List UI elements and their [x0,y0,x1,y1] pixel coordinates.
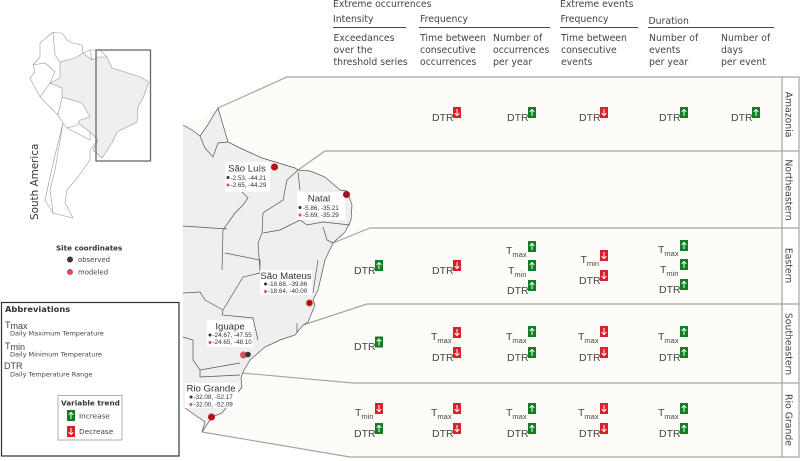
panel: abbreviations: Daily Temperature Range [10,370,92,378]
legend: site coordinates: Site coordinates [56,244,122,252]
label: Iguape [207,320,253,347]
table headers: threshold series [334,57,408,68]
row: Eastern trends: T [580,254,587,266]
panel: abbreviations [2,302,179,456]
row: Eastern trends: DTR [579,275,601,287]
map: eastern Brazil [183,108,352,432]
inset map: South America [30,32,150,218]
table headers: events [649,45,680,56]
label: Natal: -5.69, -35.29 [303,212,339,219]
row: Amazonia trends: DTR [659,112,681,124]
panel: table background [183,77,782,457]
row: Southeastern trends: T [578,331,584,343]
table headers [333,0,774,68]
row: Amazonia trends [432,107,760,124]
table headers: Duration [648,16,689,27]
table headers: Time between [419,33,486,44]
label: Natal [297,192,345,220]
row: Eastern trends: DTR [507,285,529,297]
label: Rio Grande: -32.00, -52.09 [194,402,233,408]
table headers: days [721,45,743,56]
label: Iguape: -24.67, -47.55 [212,332,252,339]
label: São Mateus: -18.68, -39.86 [268,281,308,288]
label: Rio Grande: Rio Grande [186,384,236,394]
label: São Luís: -2.65, -44.29 [230,182,267,189]
row: Amazonia trends: DTR [432,112,454,124]
table headers: Time between [560,33,627,44]
panel: abbreviations: T [5,341,10,351]
label: Rio Grande [185,383,238,408]
row: Amazonia trends: DTR [579,112,601,124]
row: Eastern trends: DTR [432,265,454,277]
row: Rio Grande trends: max [664,412,679,421]
label: Natal: Natal [308,194,330,204]
row: Eastern trends: T [660,264,666,276]
table headers: consecutive [561,45,617,56]
row: Southeastern trends: max [512,336,527,345]
row: Rio Grande trends: max [437,412,452,421]
legend: site coordinates: modeled [78,268,108,276]
row: Rio Grande trends: T [658,407,664,419]
row: Southeastern trends: DTR [507,352,529,364]
row: Eastern trends: T [658,244,664,256]
panel: abbreviations: DTR [4,361,23,371]
row labels: Amazonia [782,92,794,137]
row: Eastern trends: min [514,270,527,279]
row: Eastern trends: DTR [659,284,681,296]
label: São Mateus: São Mateus [260,271,312,282]
label: São Mateus [260,270,312,295]
row: Rio Grande trends: DTR [507,428,529,440]
legend: variable trend: Variable trend [61,398,120,408]
label: São Luís: São Luís [228,164,266,174]
row: Rio Grande trends [354,403,688,440]
table headers: per year [493,57,532,68]
panel: abbreviations: Abbreviations [5,304,70,314]
table headers: over the [334,45,373,56]
row: Southeastern trends: max [584,336,599,345]
row: Rio Grande trends: DTR [659,428,681,440]
site markers [208,164,350,420]
table headers: per event [721,57,766,68]
row labels: Southeastern [782,313,794,375]
row labels: Eastern [782,248,794,283]
row: Rio Grande trends: T [506,407,512,419]
label: Natal: -5.86, -35.21 [303,205,339,212]
row: Southeastern trends: DTR [354,341,376,353]
row: Southeastern trends: DTR [659,352,681,364]
table headers: Frequency [560,14,609,25]
label: São Mateus: -18.64, -40.00 [268,288,308,295]
row: Rio Grande trends: DTR [579,428,601,440]
row: Rio Grande trends: max [512,412,527,421]
row: Eastern trends: DTR [354,265,376,277]
legend: variable trend: Increase [79,412,110,420]
label: Iguape: -24.65, -48.10 [212,339,252,346]
row labels [782,92,794,446]
row: Southeastern trends: max [437,336,452,345]
label: Iguape: Iguape [215,322,245,332]
row: Eastern trends [354,240,688,297]
row: Eastern trends: max [664,249,679,258]
row: Southeastern trends: T [431,331,437,343]
row: Southeastern trends: DTR [579,352,601,364]
table headers: occurrences [493,45,550,56]
row: Amazonia trends: DTR [731,112,753,124]
table headers: consecutive [420,45,476,56]
row: Amazonia trends: DTR [507,112,529,124]
row labels: Rio Grande [782,394,794,446]
row: Rio Grande trends: max [584,412,599,421]
table headers: Frequency [420,14,469,25]
table headers: Number of [721,33,771,44]
legend: site coordinates: observed [78,256,110,264]
legend: variable trend: Decrease [79,427,114,436]
table headers: Number of [649,33,699,44]
row: Rio Grande trends: DTR [354,428,376,440]
row: Rio Grande trends: T [431,407,437,419]
table headers: Intensity [333,14,374,25]
panel: abbreviations: T [5,320,10,330]
row labels: Northeastern [782,159,794,221]
panel: abbreviations: Daily Minimum Temperature [10,350,102,358]
table headers: Exceedances [334,33,395,44]
legend: variable trend [58,396,122,440]
panel: abbreviations: Daily Maximum Temperature [10,330,104,338]
legend: site coordinates [56,244,122,276]
label: Rio Grande: -32.08, -52.17 [194,394,233,401]
row: Eastern trends: max [512,250,527,259]
row: Southeastern trends: T [658,331,664,343]
row: Eastern trends: T [506,245,512,257]
label: São Luís: -2.53, -44.21 [230,175,267,182]
row: Southeastern trends: T [506,331,512,343]
row: Eastern trends: T [508,265,514,277]
table headers: per year [649,57,688,68]
table headers: occurrences [420,57,477,68]
panel: row dividers and connectors [202,77,799,457]
row: Rio Grande trends: min [361,412,374,421]
heading: South America: South America [29,144,41,220]
row: Rio Grande trends: T [578,407,584,419]
row: Rio Grande trends: T [355,407,361,419]
panel: abbreviations: min [10,342,25,352]
panel: abbreviations: max [10,321,28,331]
row: Southeastern trends: max [664,336,679,345]
table headers: Number of [493,33,543,44]
row: Eastern trends: min [587,259,599,268]
table headers: events [561,57,592,68]
row: Rio Grande trends: DTR [432,428,454,440]
row: Southeastern trends [354,326,688,364]
row: Southeastern trends: DTR [432,352,454,364]
row: Eastern trends: min [666,269,679,278]
label: São Luís [225,162,270,192]
